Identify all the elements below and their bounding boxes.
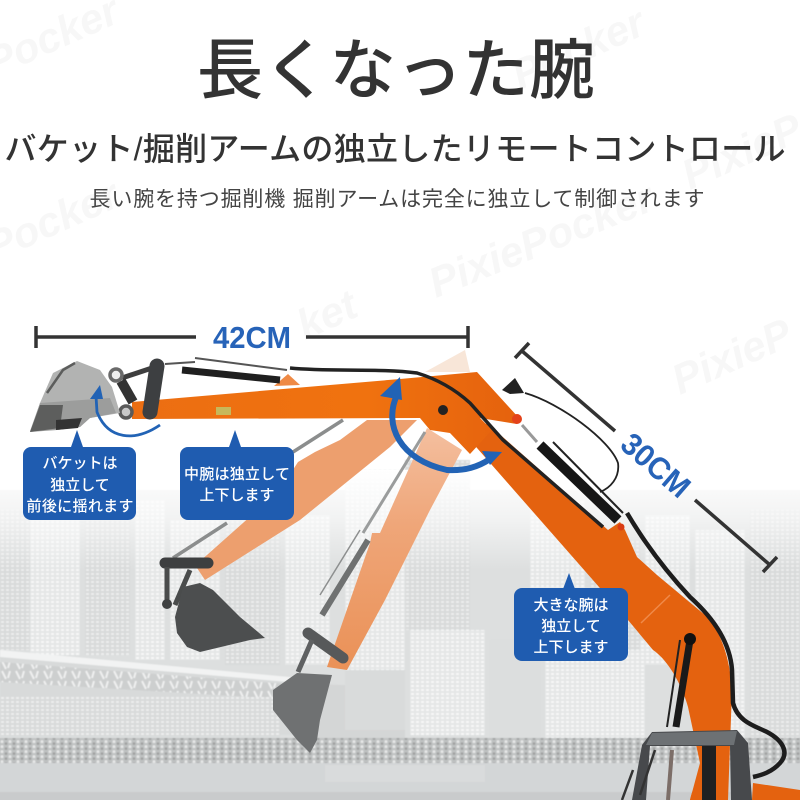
arm label sticker [216,407,231,415]
callout: middle arm [180,430,294,520]
sky fade [0,470,800,570]
description: 長い腕を持つ掘削機 掘削アームは完全に独立して制御されます [90,188,704,211]
rotation arrow boom [380,377,502,470]
ghost excavator arm upper position [162,420,417,652]
length dimension 42CM [36,320,468,355]
callout: bucket [23,430,136,520]
callout: large arm [514,573,628,661]
callout: large arm: 大きな腕は [533,597,609,614]
callout: large arm: 上下します [533,639,609,656]
callout: bucket: バケットは [42,455,118,472]
boom base cylinder [667,633,696,727]
rotation arrow bucket [90,385,160,436]
ghost boom top [425,350,470,372]
watermarks: ket [290,280,366,348]
length dimension 30CM [515,343,777,572]
callout: middle arm: 中腕は独立して [184,466,290,483]
bucket [30,361,120,432]
main boom [470,423,732,800]
callout: bucket: 独立して [50,477,110,494]
hose along arm [290,368,603,527]
callout: middle arm: 上下します [199,487,275,504]
callout: bucket: 前後に揺れます [26,498,134,515]
dipper cylinder [110,358,287,418]
ground [0,763,800,800]
crowd band [0,738,800,764]
excavator body [622,730,800,800]
length dimension 30CM: 30CM [614,426,697,505]
ghost bucket lower [273,673,332,753]
length dimension 42CM: 42CM [213,320,291,355]
watermarks [0,0,800,403]
boom cylinder [502,378,624,530]
ghost excavator arm lower position [273,428,462,753]
city skyline [0,460,800,800]
ghost bucket upper [175,583,265,652]
callout: large arm: 独立して [541,618,601,635]
dipper arm [132,372,518,454]
arm pivot [438,405,448,415]
cylinder fitting [502,378,524,394]
watermarks: PixieP [665,309,800,403]
excavator main arm and boom [132,372,732,800]
bridge [0,656,400,735]
watermarks: Pocker [505,0,654,98]
subtitle: バケット/掘削アームの独立したリモートコントロール [4,131,786,167]
watermarks: PixiePocker [422,173,663,306]
cylinder mount [274,374,300,386]
linkage [150,366,157,412]
hose down boom [627,513,784,777]
title: 長くなった腕 [197,33,595,107]
